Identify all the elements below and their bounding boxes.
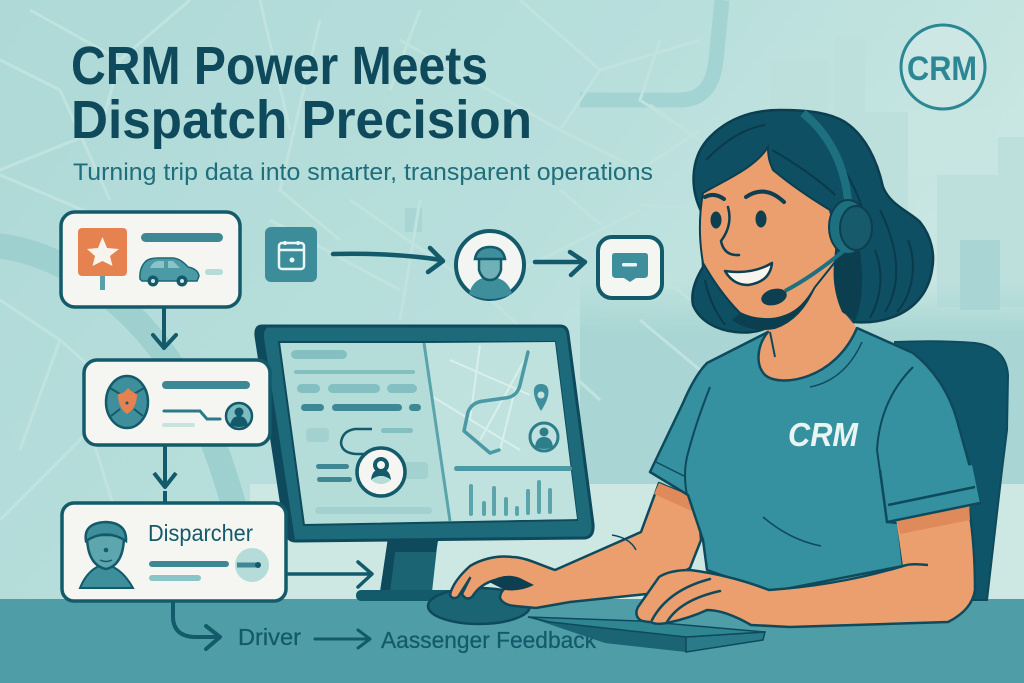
monitor screen (279, 342, 577, 525)
icon: calendar (265, 227, 317, 282)
arrow: card one to card two (153, 308, 176, 348)
monitor (256, 326, 593, 601)
sleeve hem (882, 465, 980, 522)
screen: data rows (291, 350, 432, 514)
arrow: dispatcher to driver (173, 602, 220, 649)
icon: star sign (78, 228, 127, 290)
icon: message (598, 237, 662, 298)
monitor stand (356, 538, 476, 601)
shirt (650, 328, 980, 592)
icon: agent avatar (456, 231, 524, 299)
shirt logo: CRM (788, 416, 859, 453)
arrow: driver to feedback (315, 630, 370, 648)
panel: vehicle rating card (61, 212, 240, 307)
hair detail (705, 125, 913, 325)
icon: dispatcher avatar (80, 522, 133, 588)
subtitle: Turning trip data into smarter, transparent operations (73, 159, 653, 186)
panel: dispatcher card: Disparcher (148, 520, 253, 546)
CRM logo badge (901, 25, 985, 109)
screen: user badge (357, 448, 405, 496)
bar chart (471, 482, 550, 514)
icon: avatar (226, 403, 252, 429)
chin hair crescent (732, 286, 816, 330)
icon: shield location (106, 376, 148, 428)
hair (692, 110, 933, 333)
neck (757, 262, 857, 382)
label: passenger feedback: Aassenger Feedback (381, 627, 596, 653)
keyboard (528, 617, 765, 652)
monitor frame (256, 326, 593, 541)
left arm and hand (450, 483, 701, 608)
mouse (428, 588, 530, 624)
screen: map pane (425, 342, 577, 521)
headset (759, 113, 872, 308)
face (700, 147, 837, 319)
facial features (705, 192, 784, 285)
CRM logo badge: CRM (907, 50, 977, 88)
arrow: dispatcher to monitor (288, 562, 372, 587)
screen: divider (424, 343, 450, 521)
arrow: agent to message (535, 252, 585, 275)
icon: map avatar (530, 423, 558, 451)
title (71, 36, 532, 150)
right arm and hand (636, 465, 980, 627)
panel: dispatcher card (62, 503, 286, 601)
top flow: calendar to agent to message (265, 227, 662, 299)
icon: map pin (534, 384, 548, 411)
label: driver: Driver (238, 624, 301, 650)
agent illustration (450, 110, 980, 608)
icon: car (140, 258, 199, 286)
arrow: card two to card three (154, 446, 176, 502)
panel: route card (84, 360, 270, 445)
desk (0, 599, 1024, 683)
chair (895, 341, 1008, 600)
hair shadow behind neck (834, 250, 862, 321)
arrow: calendar to agent (333, 248, 443, 272)
title: Dispatch Precision (71, 90, 532, 150)
title: CRM Power Meets (71, 36, 488, 96)
shirt seams (656, 332, 975, 546)
